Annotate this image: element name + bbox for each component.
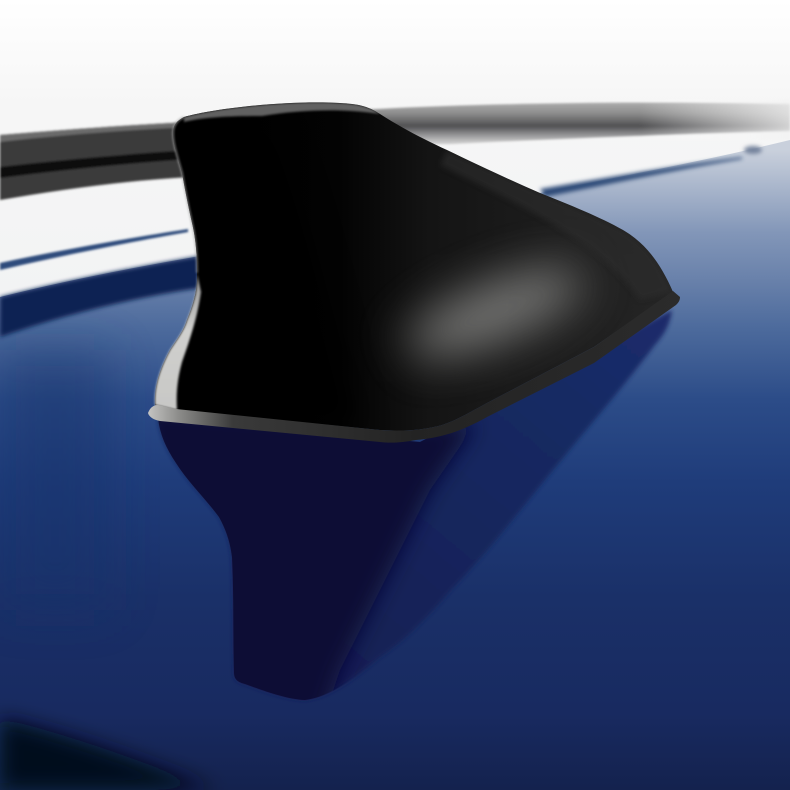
fin dark front facet: [172, 107, 239, 348]
fin reflection in the paint: [140, 310, 672, 730]
fin left edge line: [173, 117, 197, 273]
fin right edge lift: [443, 150, 670, 285]
antenna: black fin body: [155, 102, 673, 431]
roof rail: right section: [360, 100, 790, 144]
rail upper lighter edge: [0, 122, 190, 142]
bottom left shadow band: [0, 718, 215, 790]
antenna: rubber base gasket: [148, 291, 680, 443]
fin soft grey highlight: [396, 250, 594, 374]
reflection: dark navy rail band on paint: [0, 256, 200, 337]
reflection dark core: [158, 420, 476, 700]
fin top edge sheen: [184, 102, 380, 122]
left roof darkening: [0, 350, 110, 610]
small dark blotch near rail end: [744, 146, 762, 154]
roof rail: left section: [0, 122, 190, 200]
reflection: thin blue line on left pale band: [0, 229, 188, 270]
reflection: dark line along the far right roof edge: [540, 157, 742, 197]
fin leading edge white highlight: [155, 273, 201, 410]
rail dark core line: [0, 150, 190, 178]
